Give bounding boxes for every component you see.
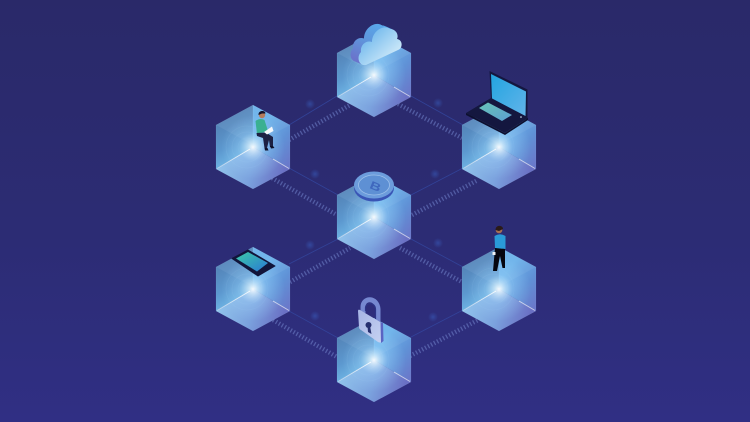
cube: user block [216,105,290,189]
icon: smartphone [232,250,275,276]
network connections [272,96,478,357]
icon: laptop [466,71,528,135]
cube: phone block [216,247,290,331]
icon: cloud [351,24,402,65]
cube: laptop block [462,105,536,189]
icon: bitcoin coin: B [368,179,383,195]
icon: bitcoin coin [354,172,394,202]
icon: standing person [492,226,506,271]
cube: coin block [337,175,411,259]
cube: lock block [337,318,411,402]
cube: standing person block [462,247,536,331]
cube: cloud block [337,33,411,117]
icon: sitting person with laptop [256,111,274,150]
icon: padlock [358,300,384,343]
